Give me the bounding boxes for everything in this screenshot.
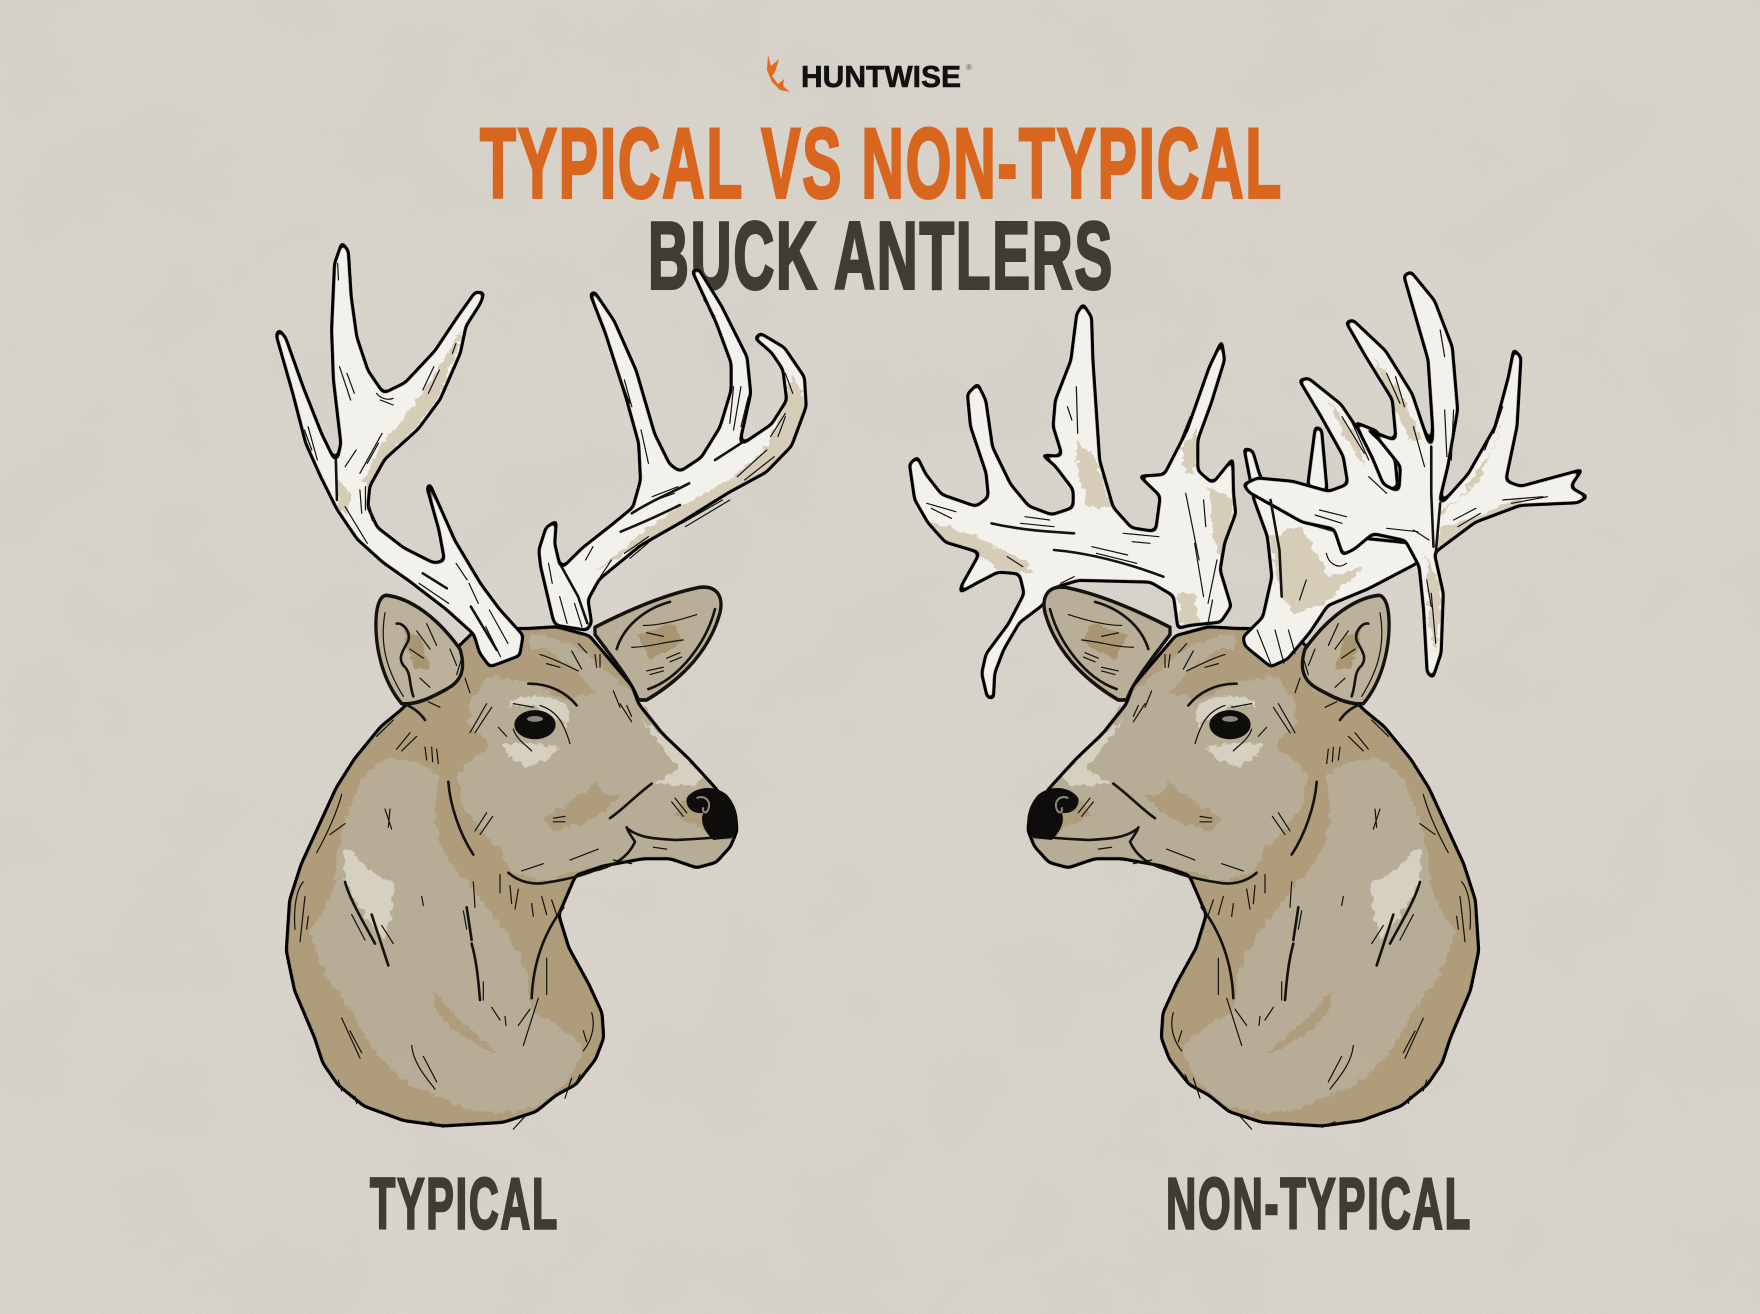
deer illustration: non-typical [908, 270, 1590, 1129]
label: typical: TYPICAL [370, 1164, 559, 1244]
icon: orange antler mark [767, 55, 790, 92]
logo wordmark: HUNTWISE [801, 59, 961, 94]
deer head and neck, mirrored [1027, 587, 1480, 1129]
front antler [275, 240, 525, 668]
subtitle: buck antlers: BUCK ANTLERS [648, 202, 1114, 310]
deer head and neck [285, 587, 738, 1129]
label: non-typical: NON-TYPICAL [1166, 1164, 1472, 1244]
front antler [1242, 270, 1590, 680]
logo: Huntwise [767, 55, 972, 94]
deer illustration: typical [275, 240, 808, 1129]
registered mark: ® [966, 63, 972, 72]
